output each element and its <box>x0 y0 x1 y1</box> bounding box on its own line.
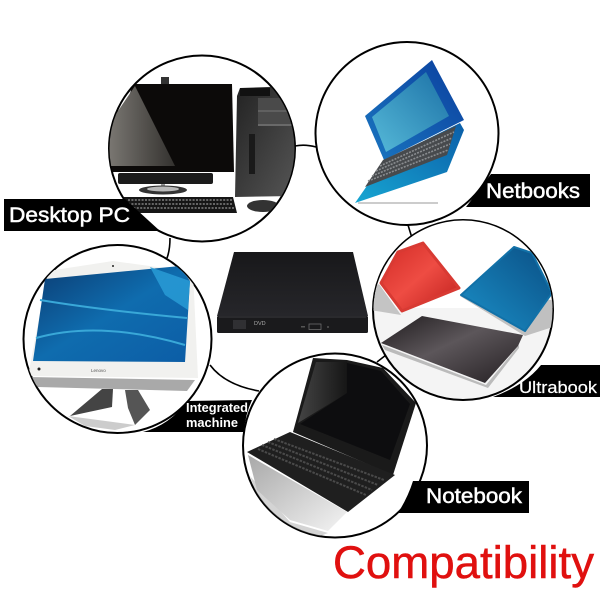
label: Netbooks <box>466 174 590 207</box>
label: Desktop PC: Desktop PC <box>9 204 130 227</box>
icon: monitor <box>105 84 234 172</box>
label: Netbooks: Netbooks <box>486 180 580 203</box>
icon: all-in-one computer <box>28 261 198 430</box>
label: Notebook <box>398 481 529 513</box>
panel: notebook <box>243 354 427 540</box>
icon: webcam <box>161 77 169 84</box>
icon: dark laptop <box>381 316 523 388</box>
icon: red laptop <box>370 243 459 315</box>
panel: ultrabook <box>370 218 560 400</box>
label: Integrated machine <box>143 400 252 432</box>
label: Integrated machine: machine <box>186 415 238 430</box>
label: Notebook: Notebook <box>426 485 523 508</box>
label: Ultrabook: Ultrabook <box>519 378 598 397</box>
icon: external DVD drive: DVD <box>254 321 266 327</box>
connector lines <box>167 145 412 391</box>
panel: netbooks <box>316 42 498 225</box>
label: Ultrabook <box>493 365 600 397</box>
icon: external DVD drive <box>217 252 368 333</box>
icon: keyboard <box>123 197 237 213</box>
label: Desktop PC <box>4 199 160 231</box>
icon: tower <box>235 86 295 197</box>
icon: blue laptop <box>460 247 556 336</box>
label: Integrated machine: Integrated <box>186 400 248 415</box>
icon: all-in-one computer: Lenovo <box>91 368 106 373</box>
title: Compatibility: Compatibility <box>333 537 594 588</box>
panel: desktop PC <box>105 56 298 242</box>
icon: mouse <box>247 200 279 212</box>
icon: notebook laptop <box>247 358 416 540</box>
panel: integrated machine <box>24 245 212 433</box>
icon: netbook <box>355 60 464 204</box>
